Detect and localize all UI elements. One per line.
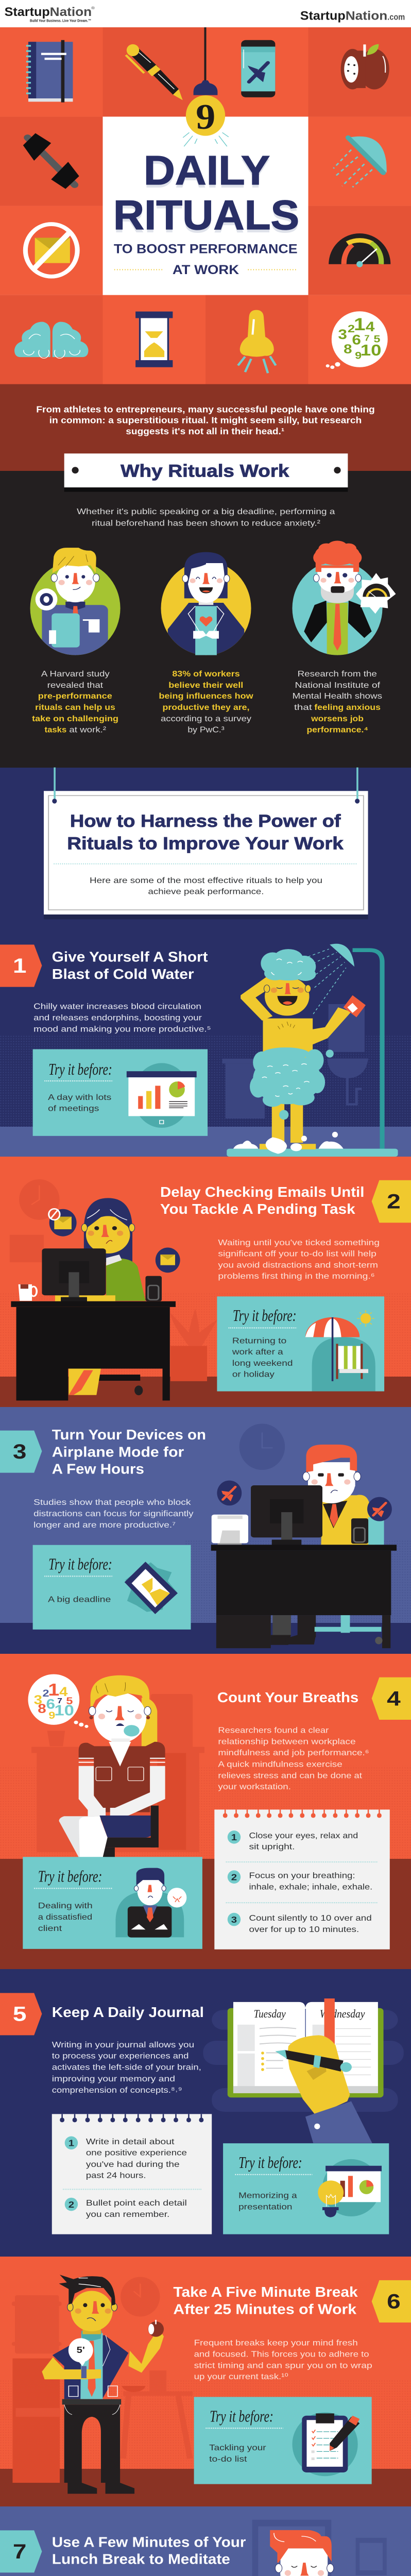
ritual 5 steps notepad: 2 xyxy=(68,2199,74,2210)
title: DAILY xyxy=(144,147,270,193)
ritual 1 heading: Give Yourself A Short xyxy=(52,949,208,965)
ritual 2 text: problems first thing in the morning.⁶ xyxy=(218,1272,375,1281)
ritual 6 text xyxy=(194,2338,372,2381)
ritual 4 illustration: woman breathing: 8 xyxy=(38,1701,46,1716)
illustration: man on break with apple: 5' xyxy=(77,2345,85,2355)
ritual 5 steps notepad: Write in detail about xyxy=(86,2137,175,2146)
title: TO BOOST PERFORMANCE xyxy=(114,242,298,256)
ritual 5 badge: 5 xyxy=(13,2003,26,2026)
ritual 4 illustration: woman breathing: 1 xyxy=(48,1680,59,1699)
stat: 83% of workers: believe their well xyxy=(168,680,243,690)
ritual 3 text: longer and are more productive.⁷ xyxy=(33,1520,176,1530)
try it before: holiday: Try it before: xyxy=(233,1307,297,1325)
why rituals work text: ritual beforehand has been shown to reduce anxiety.² xyxy=(92,518,320,528)
try it before: deadline: A big deadline xyxy=(48,1595,111,1604)
icon: counting thought bubble: 6 xyxy=(352,333,361,348)
try it before: to-do list xyxy=(194,2397,372,2484)
ritual 2 text: you avoid distractions and short-term xyxy=(218,1260,378,1269)
icon: counting thought bubble: 9 xyxy=(355,349,362,361)
illustration: man meditating at desk xyxy=(204,2520,404,2576)
ritual 5 text: Writing in your journal allows you xyxy=(52,2040,194,2049)
ritual 6 heading xyxy=(173,2284,358,2317)
stat: 83% of workers: 83% of workers xyxy=(172,669,240,679)
hanging sign panel: Here are some of the most effective rituals to help you xyxy=(90,875,322,885)
title: AT WORK xyxy=(173,262,239,277)
try it before: meetings: Try it before: xyxy=(48,1060,112,1078)
stat: mental health research xyxy=(292,669,382,734)
try it before: presentation: presentation xyxy=(238,2202,292,2211)
header logo left: Build Your Business. Live Your Dream.™ xyxy=(30,18,91,23)
ritual 2 text: Waiting until you've ticked something xyxy=(218,1238,380,1247)
hanging sign panel xyxy=(44,768,368,919)
try it before: dissatisfied client: client xyxy=(38,1923,62,1933)
ritual 5 text: improving your memory and xyxy=(52,2074,175,2083)
stat: mental health research: Research from the xyxy=(298,669,377,679)
ritual 7 heading xyxy=(52,2534,246,2567)
ritual 4 illustration: woman breathing xyxy=(28,1674,204,1861)
ritual 1 text: and releases endorphins, boosting your xyxy=(33,1013,202,1022)
icon: counting thought bubble: 3 xyxy=(338,327,347,342)
heading: why rituals work: Why Rituals Work xyxy=(121,461,289,481)
ritual 5 steps notepad: Bullet point each detail xyxy=(86,2198,187,2208)
ritual 4 steps notepad xyxy=(214,1809,390,1950)
illustration: journal and writing hand: Tuesday xyxy=(254,2008,286,2021)
ritual 5 text xyxy=(52,2040,201,2095)
ritual 7 heading: Lunch Break to Meditate xyxy=(52,2551,230,2567)
ritual 4 illustration: woman breathing: 6 xyxy=(46,1697,55,1712)
ritual 7 badge: 7 xyxy=(13,2540,26,2563)
icon: counting thought bubble: 8 xyxy=(344,342,352,356)
stat: harvard study: revealed that xyxy=(47,680,103,690)
ritual 3 and ritual 4 intro xyxy=(0,1423,411,1861)
ritual 4 illustration: woman breathing: 7 xyxy=(57,1697,62,1705)
ritual 4 steps notepad: sit upright. xyxy=(249,1842,295,1851)
stat: harvard study: take on challenging xyxy=(32,714,118,723)
ritual 7 heading: Use A Few Minutes of Your xyxy=(52,2534,246,2550)
intro text: in common: a superstitious ritual. It might seem silly, but research xyxy=(49,415,362,425)
ritual 2 badge: 2 xyxy=(387,1190,401,1213)
stat: 83% of workers xyxy=(159,669,253,734)
ritual 4 content and ritual 5 intro xyxy=(0,1725,404,2143)
ritual 6 badge xyxy=(372,2280,411,2323)
icon: phone in airplane mode xyxy=(241,40,275,97)
ritual 5 badge xyxy=(0,1993,42,2035)
ritual 5 steps notepad: past 24 hours. xyxy=(86,2171,146,2180)
icon: bitten apple xyxy=(341,44,389,89)
ritual 4 steps notepad: 1 xyxy=(231,1833,237,1842)
ritual 6 text: Frequent breaks keep your mind fresh xyxy=(194,2338,358,2347)
icon: counting thought bubble: 2 xyxy=(348,323,355,335)
header logo left: ® xyxy=(91,6,95,10)
stat: mental health research: National Institute of xyxy=(295,680,380,690)
intro text: suggests it's not all in their head.¹ xyxy=(126,427,284,436)
icon: no email xyxy=(25,224,77,277)
try it before: meetings: of meetings xyxy=(48,1104,99,1113)
illustration: woman at desk xyxy=(10,1179,217,1400)
ritual 3 heading: A Few Hours xyxy=(52,1461,144,1477)
hanging sign panel: Rituals to Improve Your Work xyxy=(67,834,344,853)
stat: harvard study: tasks xyxy=(45,725,66,734)
illustration: man in shower xyxy=(222,944,398,1157)
ritual 3 badge: 3 xyxy=(13,1440,26,1463)
icon: shower head xyxy=(333,137,387,187)
ritual 1 heading xyxy=(52,949,208,982)
ritual 4 text: relieves stress and can be done at xyxy=(218,1771,362,1780)
character: happy worker xyxy=(161,552,251,655)
illustration: journal and writing hand: Wednesday xyxy=(320,2008,365,2021)
icon: notebook xyxy=(26,40,73,103)
try it before: dissatisfied client: a dissatisfied xyxy=(38,1912,92,1922)
try it before: meetings xyxy=(33,1049,208,1136)
ritual 4 illustration: woman breathing: 4 xyxy=(59,1684,68,1699)
stat: 83% of workers: being influences how xyxy=(159,691,253,701)
header logo right: Startup xyxy=(300,9,346,23)
hero checkerboard grid xyxy=(0,27,411,384)
icon: brain xyxy=(14,322,89,358)
ritual 2 text: significant off your to-do list will help xyxy=(218,1249,376,1258)
why rituals work text xyxy=(77,507,335,528)
ritual 4 text: Researchers found a clear xyxy=(218,1725,329,1735)
heading: why rituals work xyxy=(64,453,348,492)
icon: counting thought bubble: 7 xyxy=(364,334,370,343)
stat: harvard study: rituals can help us xyxy=(35,702,115,712)
ritual 5 text: comprehension of concepts.⁸˒⁹ xyxy=(52,2085,182,2095)
ritual 5 steps notepad: you've had during the xyxy=(86,2159,180,2169)
title: DAILY xyxy=(144,150,270,196)
ritual 4 illustration: woman breathing: 5 xyxy=(66,1695,73,1707)
illustration: journal and writing hand xyxy=(203,1998,404,2143)
ritual 1 try box and ritual 2 xyxy=(10,1049,411,1400)
ritual 1 badge xyxy=(0,945,42,987)
stat: 83% of workers: according to a survey xyxy=(161,714,251,723)
icon: dumbbell xyxy=(23,133,79,189)
icon: counting thought bubble: 1 xyxy=(354,314,366,334)
ritual 5 text: to process your experiences and xyxy=(52,2051,189,2060)
how to harness and ritual 1 xyxy=(0,768,398,1157)
ritual 4 illustration: woman breathing: 2 xyxy=(43,1687,49,1699)
character: harvard researcher xyxy=(30,548,121,658)
try it before: to-do list: to-do list xyxy=(209,2454,247,2464)
stat: mental health research: Mental Health shows xyxy=(292,691,382,701)
light bulb with number 9 xyxy=(183,27,229,146)
hanging sign panel: How to Harness the Power of xyxy=(70,811,341,831)
title xyxy=(113,147,299,277)
ritual 2 heading: You Tackle A Pending Task xyxy=(160,1201,356,1217)
ritual 4 steps notepad: 3 xyxy=(231,1915,237,1925)
ritual 4 steps notepad: Focus on your breathing: xyxy=(249,1871,355,1880)
stat: 83% of workers: by PwC.³ xyxy=(187,725,225,734)
stat: mental health research: feeling anxious xyxy=(314,702,381,712)
ritual 2 badge xyxy=(372,1180,411,1223)
character: anxious worker xyxy=(292,540,396,655)
stat: harvard study xyxy=(32,669,118,734)
title: RITUALS xyxy=(113,192,299,239)
ritual 7 xyxy=(0,2520,404,2576)
icon: pen xyxy=(126,44,183,100)
hanging sign panel: achieve peak performance. xyxy=(148,887,264,896)
header logo right: .com xyxy=(387,12,405,22)
intro text xyxy=(36,404,375,436)
ritual 4 text: A quick mindfulness exercise xyxy=(218,1759,342,1769)
ritual 6 text: and focused. This forces you to adhere to xyxy=(194,2349,369,2359)
ritual 3 heading: Airplane Mode for xyxy=(52,1444,184,1460)
ritual 6 text: strict timing and can spur you on to wrap xyxy=(194,2361,372,2370)
try it before: deadline: Try it before: xyxy=(48,1555,112,1573)
ritual 5 steps notepad xyxy=(52,2114,212,2234)
icon: counting thought bubble xyxy=(326,311,388,369)
header and hero xyxy=(0,5,411,384)
ritual 1 heading: Blast of Cold Water xyxy=(52,966,194,982)
ritual 4 text: your workstation. xyxy=(218,1782,291,1791)
icon: counting thought bubble: 5 xyxy=(373,333,380,345)
header logo left: Startup xyxy=(5,5,50,19)
ritual 5 steps notepad: 1 xyxy=(68,2138,74,2148)
ritual 1 text xyxy=(33,1002,211,1033)
ritual 6 heading: After 25 Minutes of Work xyxy=(173,2301,357,2317)
ritual 4 badge xyxy=(372,1677,411,1720)
ritual 4 illustration: woman breathing: 3 xyxy=(34,1692,42,1707)
try it before: presentation: Try it before: xyxy=(238,2154,302,2172)
stat: mental health research: worsens job xyxy=(311,714,364,723)
icon: bell cone xyxy=(238,310,276,373)
ritual 4 text: relationship between workplace xyxy=(218,1737,356,1746)
icon: counting thought bubble: 4 xyxy=(366,319,375,334)
header logo right: Nation xyxy=(346,9,387,23)
try it before: deadline xyxy=(33,1545,191,1630)
try it before: dissatisfied client xyxy=(23,1857,202,1949)
stat: mental health research: performance.⁴ xyxy=(306,725,368,734)
ritual 6 text: up your current task.¹⁰ xyxy=(194,2372,288,2381)
try it before: holiday: work after a xyxy=(232,1347,283,1357)
ritual 3 heading xyxy=(52,1427,206,1477)
ritual 5 steps and ritual 6 xyxy=(12,2114,411,2494)
ritual 4 steps notepad: inhale, exhale; inhale, exhale. xyxy=(249,1882,372,1891)
try it before: to-do list: Tackling your xyxy=(209,2443,266,2452)
ritual 7 badge xyxy=(0,2530,42,2572)
try it before: holiday: long weekend xyxy=(232,1358,293,1368)
stat: mental health research: that xyxy=(294,702,312,712)
ritual 4 steps notepad: Count silently to 10 over and xyxy=(249,1913,372,1923)
stat: harvard study: at work.² xyxy=(69,725,106,734)
ritual 3 heading: Turn Your Devices on xyxy=(52,1427,206,1443)
try it before: holiday: or holiday xyxy=(232,1369,275,1379)
stat: harvard study: A Harvard study xyxy=(41,669,110,679)
icon: performance gauge xyxy=(329,233,390,267)
stat: harvard study: pre-performance xyxy=(38,691,112,701)
ritual 1 text: mood and making you more productive.⁵ xyxy=(33,1024,211,1033)
ritual 3 text xyxy=(33,1497,194,1530)
try it before: dissatisfied client: Dealing with xyxy=(38,1901,93,1910)
header logo left xyxy=(5,5,95,23)
illustration: man on break with apple xyxy=(12,2275,193,2494)
ritual 6 badge: 6 xyxy=(387,2290,401,2313)
ritual 4 illustration: woman breathing: 9 xyxy=(48,1709,55,1721)
ritual 3 badge xyxy=(0,1431,42,1473)
why rituals work text: Whether it's public speaking or a big deadline, performing a xyxy=(77,507,335,516)
ritual 3 text: distractions can focus for significantly xyxy=(33,1509,194,1518)
ritual 5 text: activates the left-side of your brain, xyxy=(52,2062,201,2072)
try it before: presentation xyxy=(223,2143,389,2234)
ritual 4 steps notepad: 2 xyxy=(231,1872,237,1882)
header logo right xyxy=(300,9,405,23)
intro and why rituals work xyxy=(30,404,396,734)
try it before: dissatisfied client: Try it before: xyxy=(38,1867,102,1886)
ritual 4 badge: 4 xyxy=(387,1687,401,1710)
title: RITUALS xyxy=(113,195,299,242)
try it before: holiday: Returning to xyxy=(232,1336,286,1345)
icon: counting thought bubble: 10 xyxy=(361,342,382,359)
ritual 4 heading: Count Your Breaths xyxy=(217,1689,358,1705)
try it before: presentation: Memorizing a xyxy=(238,2191,297,2200)
ritual 4 illustration: woman breathing: 10 xyxy=(54,1702,74,1719)
ritual 5 steps notepad: you can remember. xyxy=(86,2209,169,2219)
ritual 2 heading xyxy=(160,1184,364,1217)
light bulb with number 9: 9 xyxy=(196,97,215,137)
ritual 4 text xyxy=(218,1725,369,1791)
ritual 6 heading: Take A Five Minute Break xyxy=(173,2284,358,2300)
try it before: meetings: A day with lots xyxy=(48,1092,112,1101)
ritual 3 text: Studies show that people who block xyxy=(33,1497,191,1507)
illustration: man at desk with airplane mode xyxy=(211,1423,397,1648)
icon: hourglass xyxy=(135,312,173,367)
try it before: to-do list: Try it before: xyxy=(210,2407,273,2426)
ritual 2 text xyxy=(218,1238,380,1281)
ritual 4 text: mindfulness and job performance.⁶ xyxy=(218,1748,369,1757)
ritual 4 steps notepad: Close your eyes, relax and xyxy=(249,1831,358,1840)
stat: 83% of workers: productive they are, xyxy=(163,702,250,712)
try it before: holiday xyxy=(217,1296,384,1392)
ritual 5 steps notepad: one positive experience xyxy=(86,2148,187,2157)
ritual 5 heading: Keep A Daily Journal xyxy=(52,2004,204,2020)
ritual 4 steps notepad: over for up to 10 minutes. xyxy=(249,1924,359,1934)
ritual 1 text: Chilly water increases blood circulation xyxy=(33,1002,201,1011)
intro text: From athletes to entrepreneurs, many successful people have one thing xyxy=(36,404,375,414)
ritual 1 badge: 1 xyxy=(13,955,26,977)
ritual 2 heading: Delay Checking Emails Until xyxy=(160,1184,364,1200)
header logo left: Nation xyxy=(50,5,92,19)
